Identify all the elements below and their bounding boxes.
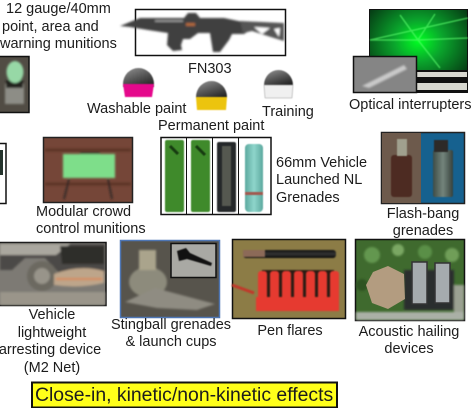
label: 66mm vehicle launched NL grenades: 66mm Vehicle bbox=[276, 155, 367, 171]
label: acoustic hailing devices: Acoustic hailing bbox=[359, 324, 459, 340]
ball: washable paint bbox=[123, 68, 154, 97]
label: vehicle lightweight arresting device bbox=[0, 307, 101, 376]
photo: 66mm grenades bbox=[161, 138, 271, 214]
label: 12 gauge munitions bbox=[0, 1, 117, 52]
label: stingball grenades bbox=[111, 317, 231, 350]
label: flash-bang grenades bbox=[387, 206, 459, 239]
banner: close-in effects: Close-in, kinetic/non-kinetic effects bbox=[35, 384, 333, 406]
label: stingball grenades: & launch cups bbox=[125, 334, 217, 350]
label: acoustic hailing devices bbox=[359, 324, 459, 357]
label: washable paint: Washable paint bbox=[87, 101, 186, 117]
photo: acoustic hailing device bbox=[356, 240, 464, 320]
label: acoustic hailing devices: devices bbox=[384, 341, 434, 357]
label: 12 gauge munitions: point, area and bbox=[2, 19, 99, 35]
label: flash-bang grenades: grenades bbox=[393, 223, 453, 239]
label: vehicle lightweight arresting device: Vehicle bbox=[29, 307, 75, 323]
photo: modular crowd control munition bbox=[44, 138, 132, 202]
label: permanent paint: Permanent paint bbox=[158, 118, 264, 134]
label: 66mm vehicle launched NL grenades: Launched NL bbox=[276, 172, 362, 188]
photo: pen flares bbox=[232, 240, 346, 318]
photo: partial device at left edge bbox=[0, 144, 6, 204]
label: stingball grenades: Stingball grenades bbox=[111, 317, 231, 333]
label: modular crowd control munitions: control munitions bbox=[36, 221, 146, 237]
label: 12 gauge munitions: 12 gauge/40mm bbox=[6, 1, 111, 17]
label: pen flares: Pen flares bbox=[257, 323, 323, 339]
label: training: Training bbox=[262, 104, 314, 120]
label: flash-bang grenades: Flash-bang bbox=[387, 206, 459, 222]
label: modular crowd control munitions bbox=[36, 204, 146, 237]
label: vehicle lightweight arresting device: arresting device bbox=[0, 342, 101, 358]
label: vehicle lightweight arresting device: (M2 Net) bbox=[24, 360, 80, 376]
label: vehicle lightweight arresting device: lightweight bbox=[18, 325, 86, 341]
photo: vehicle arresting net bbox=[0, 242, 106, 306]
photo: FN303 launcher bbox=[120, 10, 286, 56]
ball: training bbox=[264, 70, 293, 98]
label: optical interrupters: Optical interrupters bbox=[349, 97, 472, 113]
photo: optical interrupters bbox=[354, 10, 468, 92]
label: FN303: FN303 bbox=[188, 61, 232, 77]
photo: 12 gauge round bbox=[0, 56, 29, 112]
label: 12 gauge munitions: warning munitions bbox=[0, 36, 117, 52]
label: 66mm vehicle launched NL grenades: Grenades bbox=[276, 190, 340, 206]
photo: stingball grenade bbox=[120, 240, 220, 318]
label: 66mm vehicle launched NL grenades bbox=[276, 155, 367, 206]
photo: flash-bang grenades bbox=[382, 132, 464, 204]
ball: permanent paint bbox=[196, 81, 227, 110]
label: modular crowd control munitions: Modular crowd bbox=[36, 204, 131, 220]
